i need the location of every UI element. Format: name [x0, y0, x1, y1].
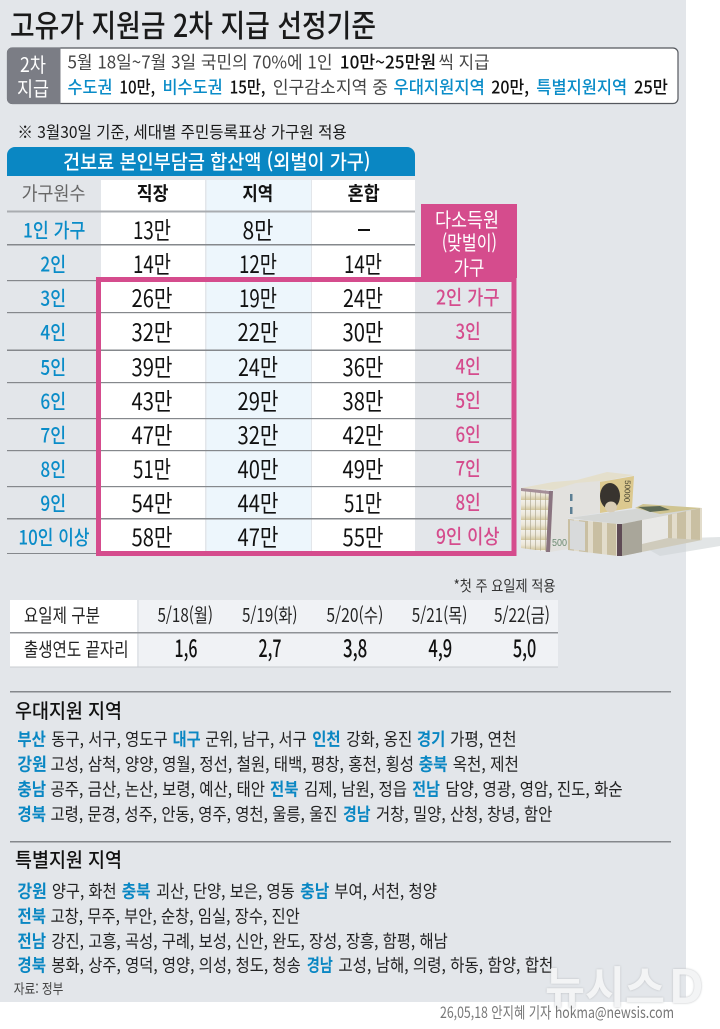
summary line 2: 15만,: [230, 74, 265, 100]
summary line 2: 20만,: [491, 74, 529, 100]
region line 1: 부여, 서천, 청양: [334, 878, 437, 904]
multi-earner tab: [421, 204, 517, 281]
column: workplace: 32만: [132, 313, 172, 348]
label: second payment: [7, 48, 60, 104]
region line 4: 거창, 밀양, 산청, 창녕, 함안: [376, 802, 552, 826]
column: mixed: 30만: [342, 313, 384, 348]
panel: preferential support regions: [10, 691, 671, 826]
column: workplace: [132, 211, 172, 553]
birth year row: 3,8: [343, 629, 367, 664]
note: ※ 3월30일 기준, 세대별 주민등록표상 가구원 적용: [17, 119, 347, 143]
region line 4: 경북: [17, 802, 46, 826]
region line 4: [17, 802, 552, 826]
birth year row: 2,7: [258, 629, 282, 664]
summary line 2: 우대지원지역: [394, 74, 485, 100]
column: regional: 40만: [238, 450, 278, 485]
region line 1: [17, 726, 517, 752]
region line 1: 충남: [300, 878, 329, 904]
weekday row: [24, 601, 550, 628]
icon: stacks of banknotes: 500: [552, 538, 567, 549]
household size labels: 3인: [40, 283, 66, 312]
highlight frame: [98, 280, 514, 554]
heading: 특별지원 지역: [15, 844, 122, 873]
region line 2: 옥천, 제천: [453, 752, 519, 776]
weekday row: 5/20(수): [326, 601, 383, 628]
note: first week rule: *첫 주 요일제 적용: [454, 575, 556, 596]
region line 3: 전남: [17, 928, 46, 954]
column: workplace: 43만: [132, 382, 172, 417]
household size labels: 6인: [40, 386, 66, 415]
column: workplace: 54만: [132, 484, 172, 519]
multi-earner tab: (맞벌이): [442, 227, 497, 256]
watermark: D: [670, 960, 703, 1014]
panel: special support regions: [10, 841, 671, 978]
household size labels: 10인 이상: [18, 522, 89, 551]
column: regional: 12만: [239, 245, 277, 280]
region line 3: 담양, 영광, 영암, 진도, 화순: [445, 776, 623, 802]
column: workplace: 26만: [132, 279, 172, 314]
region line 4: 경남: [343, 802, 370, 826]
region line 4: 경남: [307, 952, 333, 978]
column: mixed: 24만: [343, 279, 383, 314]
summary line 2: 25만: [634, 74, 668, 100]
summary line 2: 인구감소지역 중: [273, 74, 388, 100]
summary line 2: 10만,: [119, 74, 155, 100]
column: workplace: 14만: [133, 245, 171, 280]
household size labels: 2인: [40, 249, 66, 278]
region line 1: 괴산, 단양, 보은, 영동: [156, 878, 295, 904]
watermark: 뉴시스: [545, 952, 665, 1016]
region line 3: 전북: [270, 776, 298, 802]
household size labels: 1인 가구: [23, 215, 85, 244]
region line 2: 전북: [17, 904, 46, 928]
column: workplace: 13만: [133, 211, 171, 246]
column: mixed: 42만: [342, 416, 384, 451]
birth year row: 4,9: [428, 629, 452, 664]
region line 4: 고령, 문경, 성주, 안동, 영주, 영천, 울릉, 울진: [50, 802, 338, 826]
multi-earner household labels: 7인: [456, 453, 481, 482]
birth year row: [24, 629, 536, 664]
column: workplace: 47만: [132, 416, 172, 451]
region line 1: [17, 878, 437, 904]
region line 2: 고성, 삼척, 양양, 영월, 정선, 철원, 태백, 평창, 홍천, 횡성: [50, 752, 414, 776]
panel: weekday rotation table: [10, 600, 558, 668]
column: regional: 24만: [238, 348, 278, 383]
column: regional: [238, 211, 278, 553]
column: workplace: 51만: [133, 450, 171, 485]
column: regional: 44만: [238, 484, 278, 519]
summary line 2: 수도권: [68, 74, 112, 100]
multi-earner household labels: 6인: [456, 419, 481, 448]
column: workplace: 39만: [132, 348, 172, 383]
column: mixed: 38만: [342, 382, 384, 417]
household size labels: 9인: [40, 488, 66, 517]
birth year row: 출생연도 끝자리: [24, 635, 129, 662]
title: 고유가 지원금 2차 지급 선정기준: [10, 1, 376, 46]
column: mixed: 51만: [344, 484, 382, 519]
weekday row: 5/22(금): [494, 601, 550, 628]
summary line 1: 10만~25만원: [340, 50, 436, 74]
household size labels: 4인: [40, 317, 66, 346]
region line 1: 충북: [122, 878, 151, 904]
column: mixed: 55만: [342, 518, 384, 553]
region line 3: [17, 776, 623, 802]
multi-earner household labels: 3인: [456, 316, 481, 345]
multi-earner tab: 가구: [454, 252, 484, 281]
table header band: 건보료 본인부담금 합산액 (외벌이 가구): [63, 146, 370, 175]
region line 2: 고창, 무주, 부안, 순창, 임실, 장수, 진안: [50, 904, 300, 928]
column headers: [22, 179, 380, 206]
summary line 2: [68, 74, 668, 100]
region line 4: 봉화, 상주, 영덕, 영양, 의성, 청도, 청송: [51, 952, 301, 978]
multi-earner household labels: 8인: [456, 487, 481, 516]
multi-earner tab: 다소득원: [435, 204, 499, 233]
column headers: 혼합: [348, 179, 380, 206]
region line 2: 충북: [419, 752, 448, 776]
summary line 2: 비수도권: [162, 74, 223, 100]
household size labels: 8인: [40, 454, 66, 483]
panel: premium table: [7, 146, 517, 554]
region line 1: 대구: [173, 726, 201, 752]
icon: stacks of banknotes: [521, 472, 720, 556]
household size labels: [18, 215, 89, 551]
column: regional: 22만: [238, 313, 278, 348]
weekday row: 5/19(화): [242, 601, 298, 628]
column headers: 직장: [137, 179, 168, 206]
column headers: 지역: [242, 179, 273, 206]
summary line 1: [68, 50, 490, 74]
summary line 1: 씩 지급: [438, 50, 490, 74]
column: regional: 19만: [239, 279, 277, 314]
heading: 우대지원 지역: [15, 695, 122, 724]
household size labels: 7인: [40, 420, 66, 449]
region line 3: 강진, 고흥, 곡성, 구례, 보성, 신안, 완도, 장성, 장흥, 함평, 해남: [51, 928, 448, 954]
region line 1: 경기: [417, 726, 445, 752]
summary line 1: 5월 18일~7월 3일 국민의 70%에 1인: [68, 50, 332, 74]
region line 1: 인천: [312, 726, 341, 752]
column: workplace: 58만: [132, 518, 172, 553]
region line 1: 동구, 서구, 영도구: [51, 726, 168, 752]
region line 1: 강화, 옹진: [346, 726, 412, 752]
region line 3: 공주, 금산, 논산, 보령, 예산, 태안: [50, 776, 265, 802]
column: mixed: 49만: [342, 450, 384, 485]
multi-earner household labels: 5인: [456, 385, 481, 414]
source: 자료: 정부: [14, 979, 63, 999]
panel: payment summary: [7, 48, 678, 104]
region line 4: [17, 952, 553, 978]
region line 1: 강원: [17, 878, 47, 904]
weekday row: 5/18(월): [158, 601, 213, 628]
region line 4: 고성, 남해, 의령, 하동, 함양, 합천: [338, 952, 553, 978]
column headers: 가구원수: [22, 179, 85, 206]
column: mixed: 36만: [342, 348, 384, 383]
region line 3: 김제, 남원, 정읍: [304, 776, 407, 802]
region line 3: 충남: [17, 776, 46, 802]
label: second payment: 지급: [17, 73, 49, 102]
birth year row: 5,0: [513, 629, 536, 664]
column: regional: 47만: [238, 518, 278, 553]
label: second payment: 2차: [20, 49, 46, 78]
region line 1: 부산: [17, 726, 46, 752]
multi-earner household labels: 9인 이상: [436, 521, 500, 550]
icon: stacks of banknotes: 50000: [622, 480, 632, 503]
column: regional: 32만: [238, 416, 278, 451]
region line 2: 강원: [17, 752, 47, 776]
weekday row: 요일제 구분: [24, 601, 100, 628]
summary line 2: 특별지원지역: [536, 74, 627, 100]
region line 4: 경북: [17, 952, 46, 978]
region line 1: 양구, 화천: [52, 878, 117, 904]
column: regional: 8만: [242, 211, 274, 246]
column: mixed: 14만: [344, 245, 382, 280]
region line 1: 군위, 남구, 서구: [205, 726, 307, 752]
multi-earner household labels: 2인 가구: [436, 282, 500, 311]
weekday row: 5/21(목): [412, 601, 467, 628]
birth year row: 1,6: [174, 629, 197, 664]
multi-earner household labels: 4인: [456, 351, 481, 380]
region line 3: 전남: [412, 776, 440, 802]
household size labels: 5인: [40, 352, 66, 381]
column: mixed: [342, 229, 384, 553]
region line 1: 가평, 연천: [450, 726, 516, 752]
multi-earner household labels: [436, 282, 500, 550]
column: regional: 29만: [238, 382, 278, 417]
